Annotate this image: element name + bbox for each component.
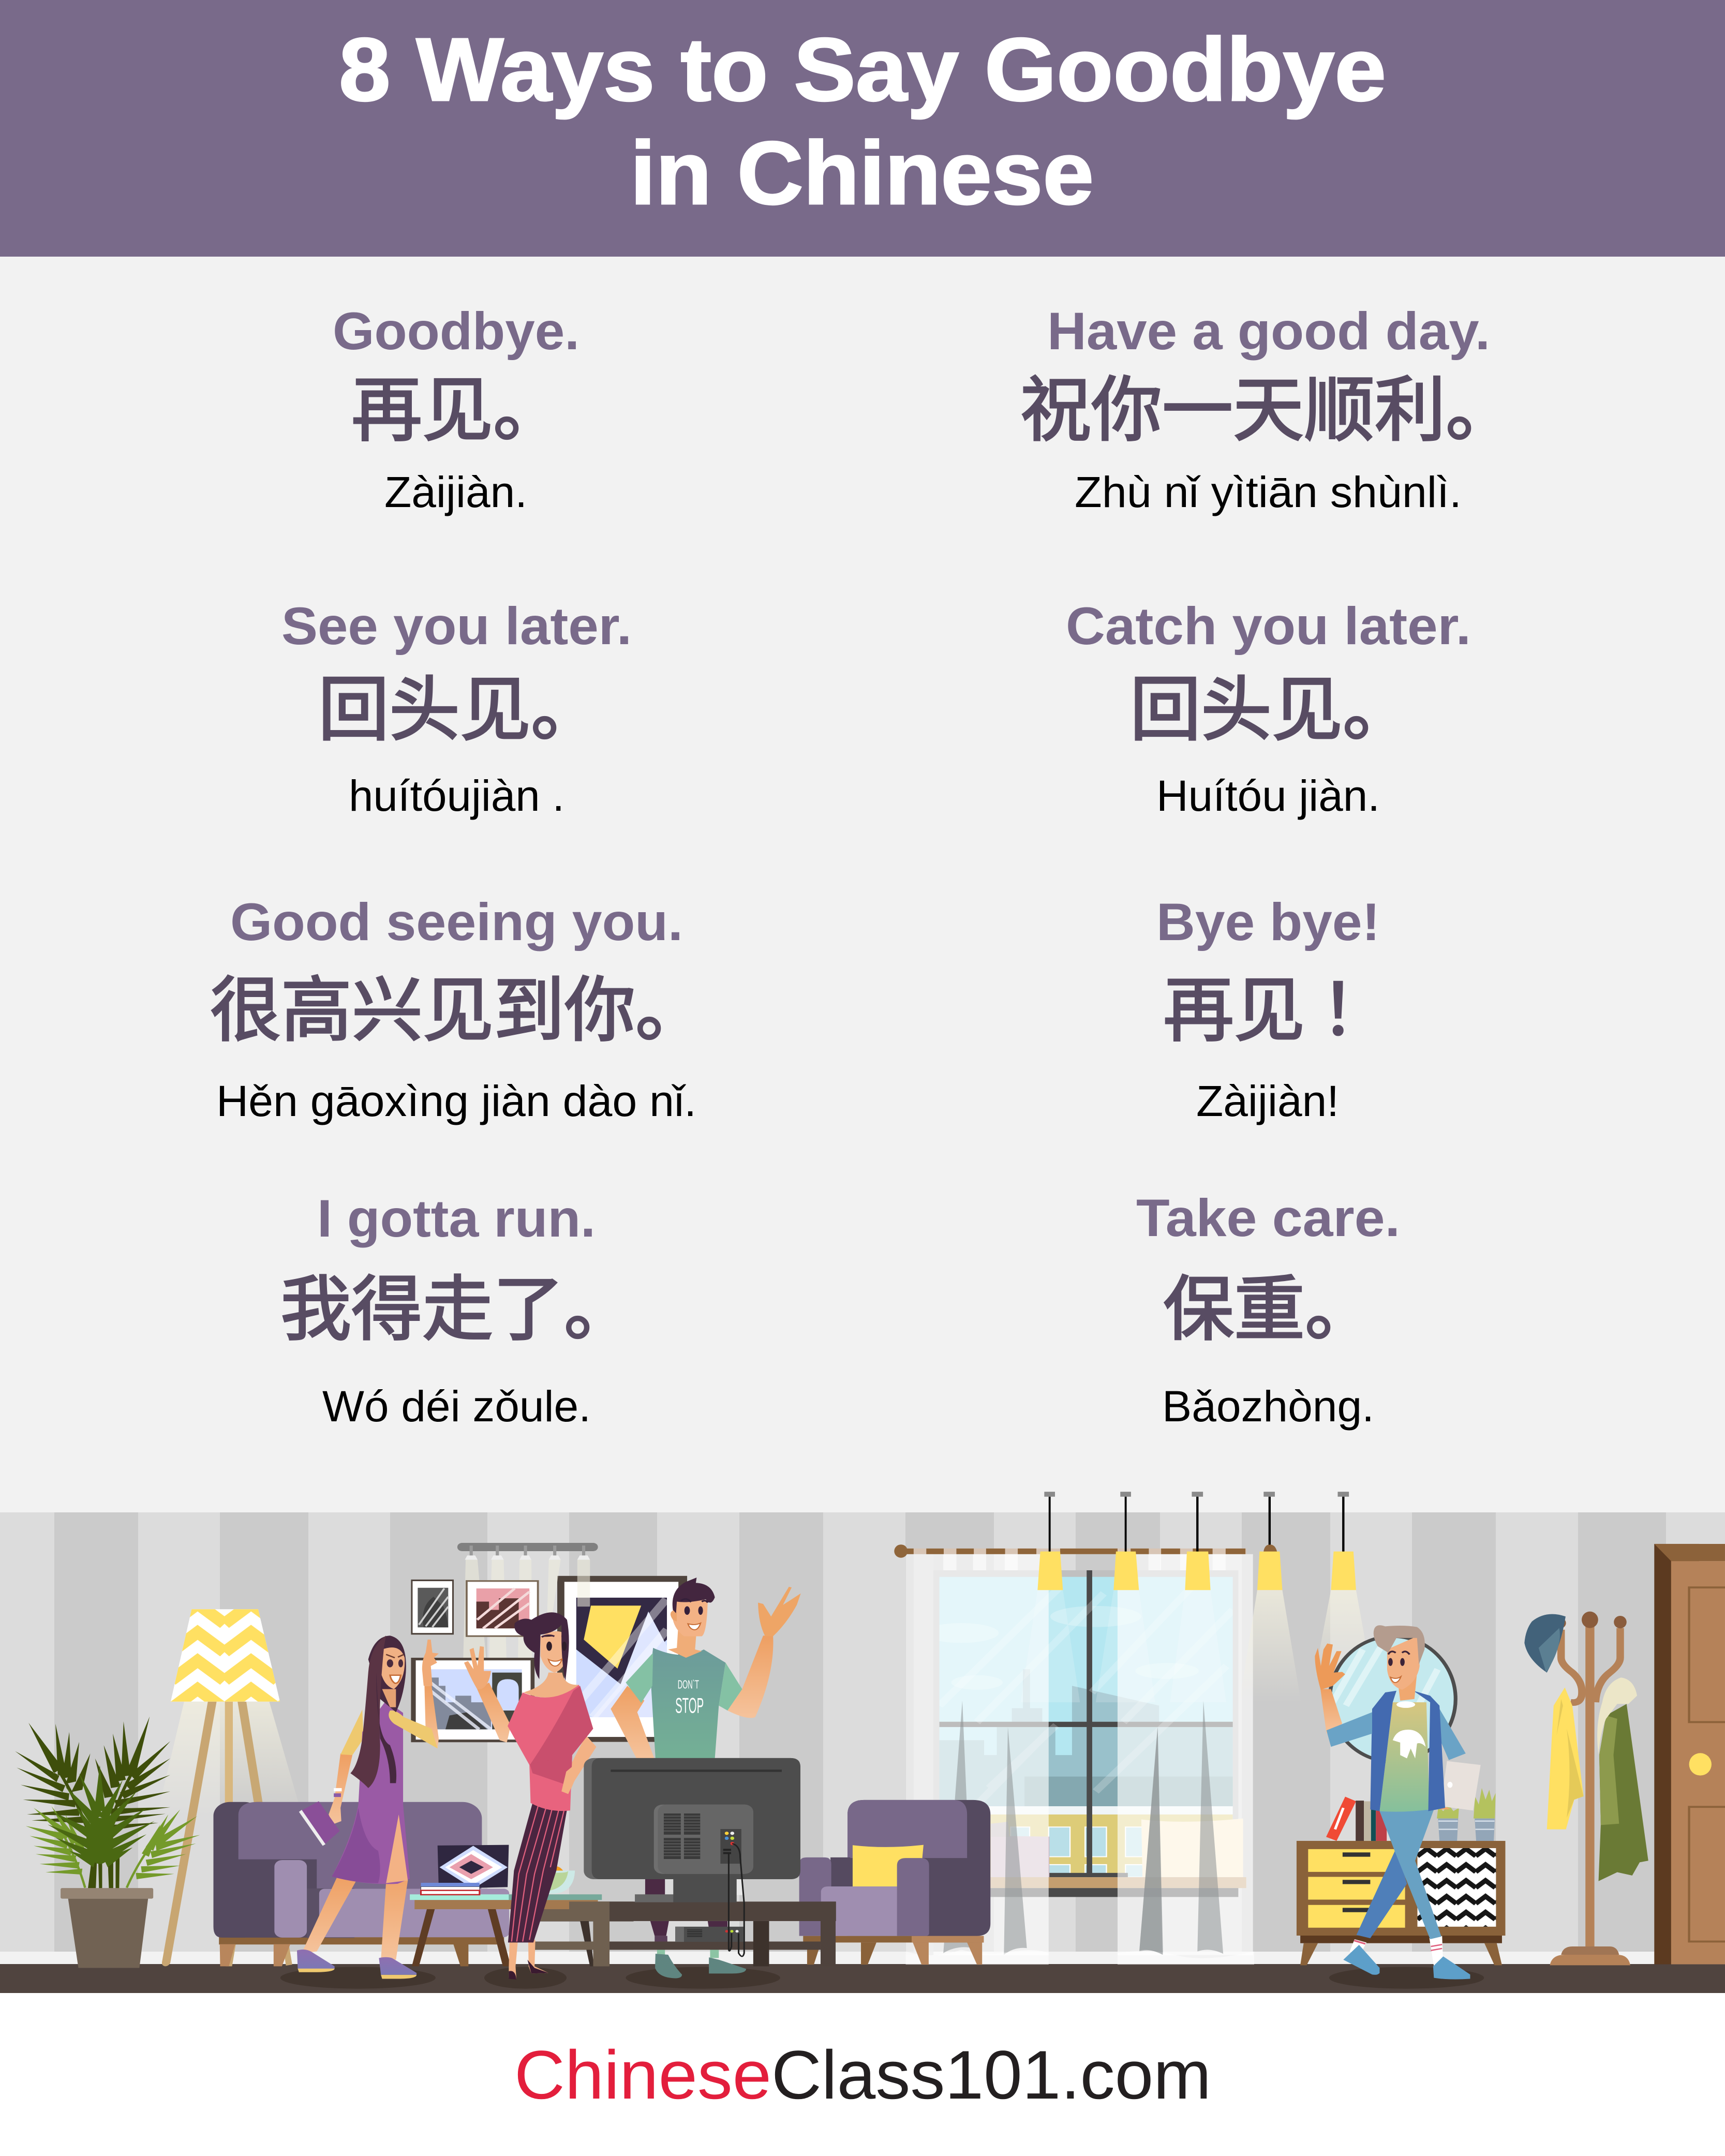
- phrase: Catch you later: [1066, 597, 1471, 820]
- small framed picture: [411, 1580, 454, 1634]
- floor shadows: [280, 1967, 567, 1989]
- header banner: [0, 0, 1725, 257]
- woman in pink top: [464, 1612, 597, 1980]
- man in green t-shirt: [611, 1578, 801, 1759]
- man in green t-shirt: STOP: [675, 1693, 704, 1718]
- plant pot: [68, 1899, 148, 1968]
- left part of room: [15, 1543, 633, 1989]
- neck: [1399, 1673, 1417, 1701]
- floor shadow: [1329, 1967, 1484, 1989]
- man's legs behind stand: [645, 1879, 665, 1895]
- glass highlights: [977, 1588, 1173, 1793]
- curtain rod: [894, 1544, 1246, 1558]
- english: Have a good day.: [1047, 302, 1490, 361]
- tv stand left section: [521, 1901, 633, 1966]
- phrase: Take care: [1136, 1188, 1400, 1431]
- chinese: 我得走了。: [280, 1270, 635, 1349]
- coffee table with books and bowl: [410, 1866, 602, 1966]
- shirt: [1379, 1702, 1430, 1812]
- phrase: Good seeing you: [210, 893, 706, 1125]
- back leg: [1357, 1848, 1407, 1938]
- floor: [0, 1964, 1725, 1993]
- pinyin: huítóujiàn .: [349, 771, 564, 820]
- laptop: [1439, 1761, 1481, 1810]
- face: [380, 1647, 405, 1689]
- title line 1: 8 Ways to Say Goodbye: [339, 19, 1386, 120]
- cushions on window seat: [991, 1836, 1049, 1877]
- pinyin: Zàijiàn!: [1196, 1077, 1339, 1125]
- other arm: [562, 1735, 597, 1793]
- city framed picture: [411, 1658, 534, 1742]
- yellow cushion: [853, 1845, 924, 1887]
- door: [1654, 1544, 1725, 1964]
- city view through window: [924, 1606, 1235, 1877]
- long hair front: [350, 1635, 386, 1788]
- phrase: Have a good day: [1020, 302, 1516, 516]
- hair: [514, 1612, 569, 1681]
- chinese: 保重。: [1163, 1270, 1376, 1349]
- socks: [1350, 1939, 1366, 1956]
- walking man: [1315, 1625, 1470, 1979]
- large framed abstract picture: [557, 1576, 687, 1742]
- round mirror: [1330, 1637, 1455, 1762]
- chinese: 再见！: [1163, 971, 1391, 1050]
- window: [924, 1570, 1246, 1897]
- neck and head: [668, 1630, 702, 1658]
- pinyin: Wó déi zǒule.: [322, 1382, 591, 1431]
- shoes: [297, 1950, 335, 1969]
- pinyin: Zàijiàn.: [384, 468, 527, 516]
- title line 2: in Chinese: [630, 123, 1094, 223]
- man in green t-shirt: DON`T: [678, 1678, 699, 1691]
- shoes: [1343, 1945, 1379, 1975]
- chinese: 很高兴见到你。: [210, 971, 706, 1050]
- books on dresser: [1326, 1796, 1387, 1841]
- window right curtain pleat: [1139, 1701, 1223, 1955]
- right part of room: [1139, 1492, 1725, 1989]
- dresser: [1297, 1841, 1505, 1965]
- pinyin: Huítóu jiàn.: [1156, 771, 1380, 820]
- english: See you later.: [281, 597, 632, 656]
- face: [1387, 1637, 1420, 1690]
- feet: [509, 1940, 518, 1979]
- english: Bye bye!: [1156, 893, 1380, 951]
- sheer curtains: [906, 1554, 1254, 1965]
- potted grass plants: [1437, 1788, 1496, 1841]
- chinese: 回头见。: [1130, 671, 1414, 750]
- baseboard: [0, 1952, 1725, 1965]
- floor lamp: [156, 1609, 299, 1966]
- dvd box: [675, 1927, 743, 1942]
- chinese: 祝你一天顺利。: [1020, 371, 1516, 450]
- wall with stripes: [0, 1512, 1725, 1952]
- shirt: [650, 1648, 725, 1759]
- hat on rack: [1524, 1614, 1566, 1673]
- potted palm plant: [15, 1717, 200, 1968]
- centre part of room: [569, 1492, 1254, 1989]
- armchair: [799, 1800, 990, 1965]
- footer logo text: [514, 2037, 1211, 2114]
- pink top: [508, 1685, 593, 1811]
- hand on hip: [561, 1765, 575, 1794]
- green coat with fur collar: [1597, 1677, 1648, 1881]
- english: Catch you later.: [1066, 597, 1471, 656]
- pinyin: Hěn gāoxìng jiàn dào nǐ.: [216, 1077, 696, 1125]
- arms: [611, 1686, 655, 1759]
- striped pants: [508, 1803, 567, 1942]
- pinyin: Zhù nǐ yìtiān shùnlì.: [1075, 468, 1462, 516]
- sofa: [213, 1802, 509, 1966]
- curtain pleats: [943, 1701, 1163, 1955]
- yellow coat: [1547, 1687, 1584, 1830]
- window sill: [933, 1877, 1246, 1888]
- english: Good seeing you.: [230, 893, 683, 951]
- television back: [584, 1758, 800, 1956]
- book: [299, 1801, 340, 1846]
- phrase: Goodbye: [333, 302, 579, 516]
- legs: [302, 1874, 356, 1953]
- coat rack: [1550, 1612, 1630, 1965]
- english: Take care.: [1136, 1188, 1400, 1247]
- phrase: I gotta run: [280, 1189, 635, 1431]
- living room illustration: [0, 1492, 1725, 1993]
- neck and face: [524, 1673, 579, 1698]
- english: I gotta run.: [317, 1189, 596, 1248]
- pendant lamps 1 and 2: [1020, 1492, 1155, 1702]
- chinese: 再见。: [351, 371, 564, 450]
- gallery track light: [457, 1543, 598, 1738]
- television stand: [569, 1879, 836, 1966]
- pendant lamps 3 to 5: [1170, 1492, 1372, 1702]
- shirt print: [1393, 1730, 1425, 1759]
- pink framed picture: [466, 1580, 539, 1637]
- vest: [1370, 1691, 1396, 1811]
- hair: [1374, 1625, 1425, 1664]
- raised arm: [1320, 1689, 1342, 1734]
- dress: [332, 1701, 410, 1884]
- footer logo text: Chinese: [514, 2037, 771, 2114]
- cushion: [438, 1845, 509, 1889]
- phrase: See you later: [281, 597, 632, 820]
- raised arm and sleeve: [424, 1686, 439, 1748]
- door knob: [1689, 1753, 1712, 1776]
- back arm: [329, 1753, 352, 1824]
- lampshade: [171, 1609, 280, 1702]
- chinese: 回头见。: [318, 671, 602, 750]
- man's shoes: [655, 1954, 746, 1978]
- footer logo text: Class101.com: [771, 2037, 1211, 2114]
- phrase: Bye bye: [1156, 893, 1391, 1125]
- pinyin: Bǎozhòng.: [1162, 1382, 1374, 1431]
- right sleeve: [1438, 1705, 1466, 1760]
- front leg: [1379, 1809, 1441, 1939]
- woman in purple dress: [297, 1635, 439, 1979]
- cables: [728, 1843, 744, 1956]
- floor shadow: [626, 1967, 780, 1989]
- footer band: [0, 1993, 1725, 2156]
- curtain valance: [943, 1554, 1226, 1570]
- raised arm: [477, 1683, 511, 1743]
- hair back and neck: [368, 1635, 406, 1712]
- english: Goodbye.: [333, 302, 579, 361]
